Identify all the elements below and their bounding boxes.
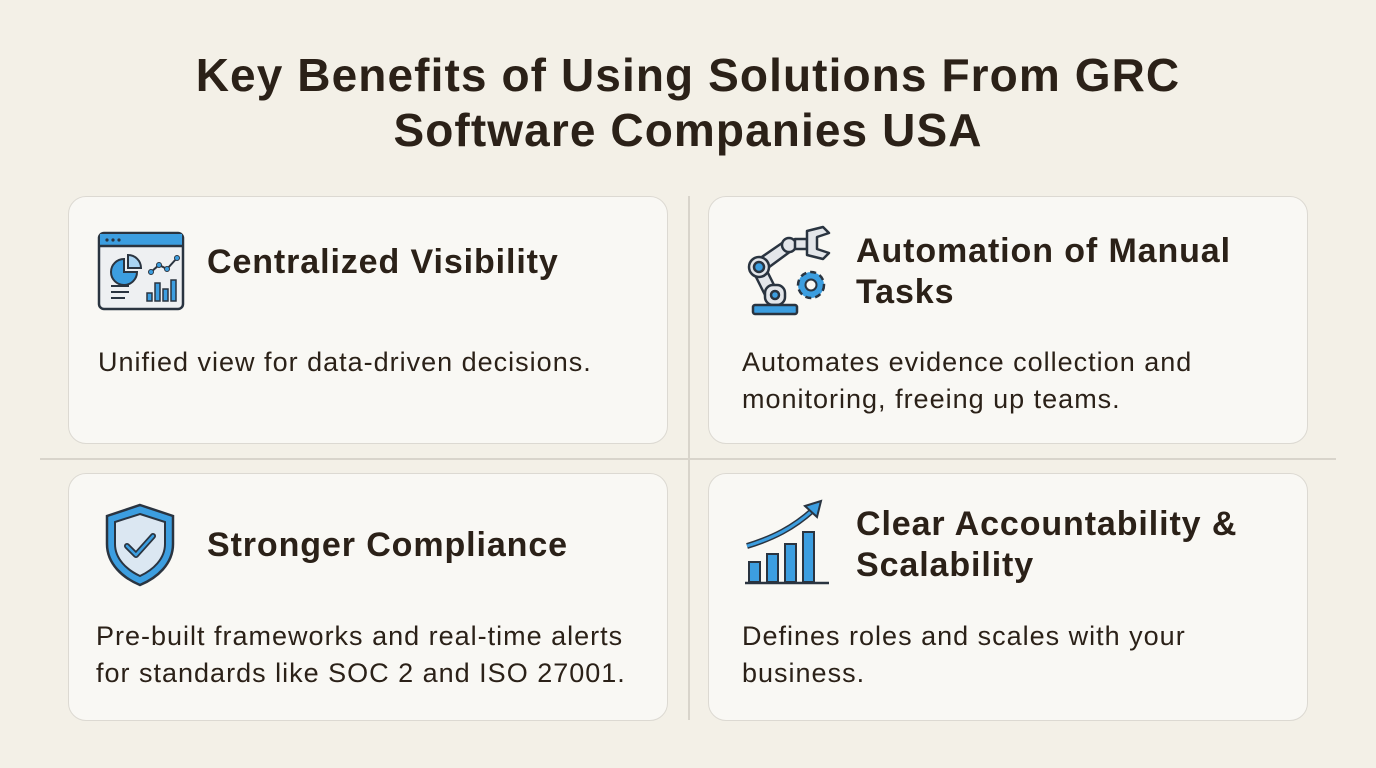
heading: Clear Accountability & [856,505,1237,543]
text [742,347,1192,414]
text: Pre-built frameworks and real-time alerts [96,621,623,651]
heading [856,505,1237,584]
heading: Stronger Compliance [207,526,568,564]
icon: growth chart [745,500,829,584]
icon: robot arm [748,226,830,316]
heading: Centralized Visibility [207,243,559,281]
heading: Automation of Manual [856,232,1231,270]
text: monitoring, freeing up teams. [742,384,1121,414]
heading: Tasks [856,273,954,311]
icon: dashboard [98,232,184,310]
heading: Scalability [856,546,1034,584]
text [742,621,1186,688]
heading [856,232,1231,311]
title [196,49,1180,156]
icon: shield [106,504,174,586]
title: Key Benefits of Using Solutions From GRC [196,49,1180,101]
text: business. [742,658,865,688]
text: Automates evidence collection and [742,347,1192,377]
panel: accountability [708,473,1308,721]
text: for standards like SOC 2 and ISO 27001. [96,658,626,688]
text: Defines roles and scales with your [742,621,1186,651]
text: Unified view for data-driven decisions. [98,347,592,377]
panel: compliance [68,473,668,721]
panel: automation [708,196,1308,444]
text [96,621,626,688]
panel: centralized visibility [68,196,668,444]
title: Software Companies USA [393,104,983,156]
